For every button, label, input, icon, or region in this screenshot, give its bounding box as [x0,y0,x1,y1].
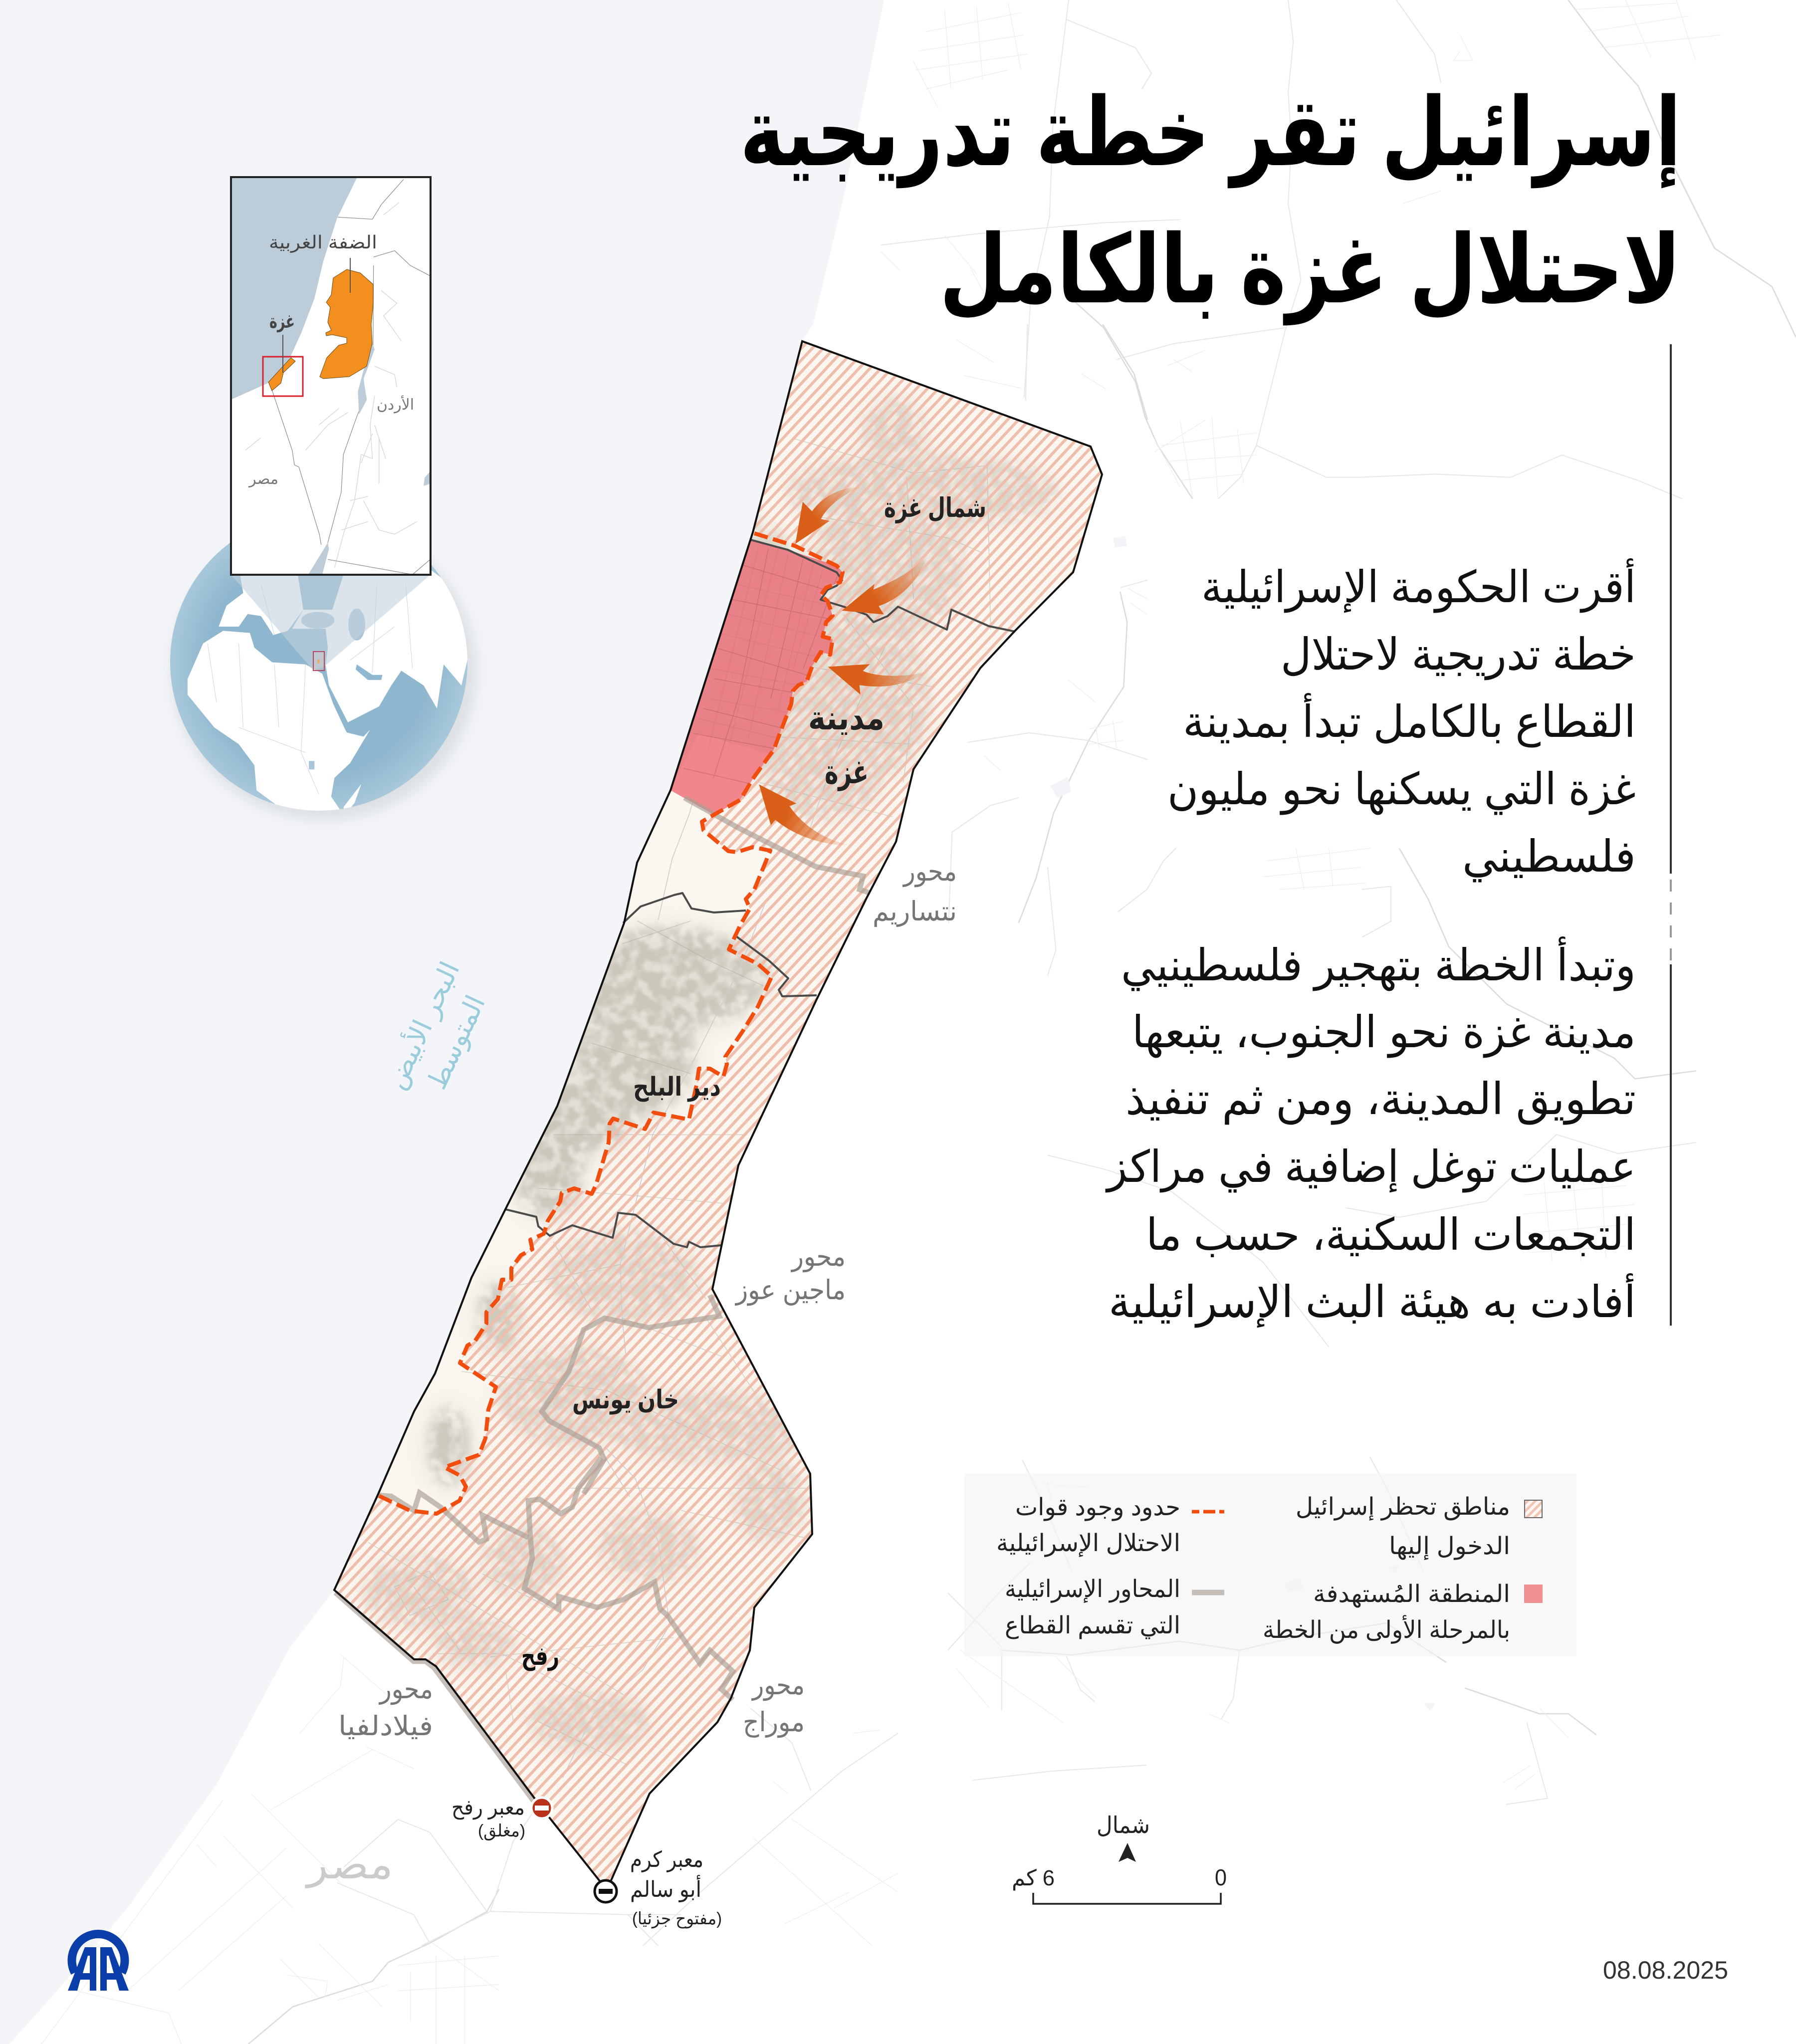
icon: Kerem Shalom crossing partly open [595,1880,617,1902]
label: Rafah crossing: (مغلق) [478,1821,525,1841]
inset Gaza [268,358,295,391]
north arrow [1097,1812,1150,1862]
legend text: axes line [1005,1576,1180,1639]
label: Morag axis: موراج [743,1707,805,1738]
legend swatch: axes line [1192,1590,1224,1595]
text block: first paragraph [1167,558,1636,883]
label: Philadelphi axis: فيلادلفيا [338,1711,433,1741]
title [740,80,1681,326]
internal roads [462,898,782,1497]
inset terrain [245,203,417,568]
label: Philadelphi axis: محور [378,1674,433,1705]
inset label: Jordan: الأردن [377,395,414,413]
occupation forces limit line [378,533,843,1514]
legend text: forbidden zones: مناطق تحظر إسرائيل [1296,1494,1510,1521]
Gaza base fill [334,341,1102,1883]
text block: first paragraph: فلسطيني [1462,832,1636,883]
municipal boundaries [505,540,1015,1247]
scale bar: 0 [1215,1864,1227,1890]
label: Gaza City: مدينة [808,699,885,736]
label: Kerem Shalom crossing: معبر كرم [630,1847,703,1872]
text block: second paragraph: عمليات توغل إضافية في مراكز [1105,1142,1636,1193]
label: Rafah crossing [451,1796,525,1841]
label: Magen Oz axis: ماجين عوز [734,1275,846,1306]
view cone to inset [231,575,431,671]
Gaza outline [334,341,1102,1883]
label: Kerem Shalom crossing [630,1847,722,1929]
legend text: axes line: المحاور الإسرائيلية [1005,1576,1180,1603]
label: Kerem Shalom crossing: (مفتوح جزئيا) [632,1909,722,1929]
scale bar: 6 كم [1012,1866,1055,1891]
legend text: occupation limit line: حدود وجود قوات [1015,1494,1180,1521]
label: Netzarim axis: نتساريم [873,897,957,927]
label: Kerem Shalom crossing: أبو سالم [630,1875,701,1902]
text block: first paragraph: القطاع بالكامل تبدأ بمدينة [1183,693,1636,747]
sea [0,0,884,2044]
vertical rule beside text [1670,344,1672,1326]
arrow: north [795,486,861,544]
text block: second paragraph: أفادت به هيئة البث الإسرائيلية [1109,1273,1636,1328]
inset water bodies [308,343,430,575]
inset locator box [263,357,303,396]
text block: second paragraph: تطويق المدينة، ومن ثم تنفيذ [1125,1074,1636,1125]
text block: second paragraph [1105,936,1636,1328]
legend text: target area [1263,1581,1510,1644]
label: North Gaza: شمال غزة [884,493,986,523]
axis: Morag branch [378,1493,528,1542]
inset sea [231,177,357,400]
legend text: forbidden zones [1296,1494,1510,1560]
text block: first paragraph: خطة تدريجية لاحتلال [1281,630,1636,680]
label: Netzarim axis [873,857,957,927]
label: Gaza City [808,699,885,791]
legend swatch: forbidden zones [1525,1500,1542,1518]
text block: second paragraph: التجمعات السكنية، حسب ما [1146,1210,1636,1259]
label: Khan Younis: خان يونس [572,1385,679,1415]
globe land [188,568,470,814]
label: Morag axis: محور [751,1670,805,1701]
legend text: target area: المنطقة المُستهدفة [1313,1581,1510,1608]
inset West Bank [320,269,373,379]
globe [170,513,476,820]
legend text: target area: بالمرحلة الأولى من الخطة [1263,1614,1510,1644]
panel: Gaza Strip map [305,341,1102,1929]
axis: Philadelphi [335,1592,540,1810]
inset label: West Bank: الضفة الغربية [269,232,377,253]
arrow: south east [759,784,851,846]
location marker on globe [313,652,324,671]
legend text: forbidden zones: الدخول إليها [1389,1533,1510,1560]
label: Magen Oz axis [734,1242,846,1306]
label: Rafah: رفح [521,1642,559,1671]
axis: Netzarim [684,798,870,893]
legend swatch: occupation limit line [1192,1510,1224,1514]
inset leaders [283,258,350,373]
icon: Rafah crossing closed [531,1798,552,1818]
logo: AA [68,1934,129,1991]
legend text: occupation limit line: الاحتلال الإسرائيلية [996,1530,1180,1557]
label: Netzarim axis: محور [902,857,957,887]
urban texture [364,399,1058,1778]
north arrow: شمال [1097,1812,1150,1838]
text block: first paragraph: غزة التي يسكنها نحو مليون [1167,764,1636,815]
text block: first paragraph: أقرت الحكومة الإسرائيلية [1201,558,1636,613]
arrows closing on Gaza City [759,486,929,846]
date: 08.08.2025 [1603,1956,1728,1984]
legend [964,1473,1576,1656]
label: Gaza City: غزة [825,753,869,791]
label: Deir al-Balah: دير البلح [633,1073,721,1102]
legend text: axes line: التي تقسم القطاع [1005,1612,1180,1639]
label: Philadelphi axis [338,1674,433,1741]
axis: Magen Oz [542,1295,719,1494]
label: Mediterranean Sea: البحر الأبيض [379,956,466,1094]
arrow: east [828,664,929,694]
label: Magen Oz axis: محور [790,1242,846,1272]
label: Rafah crossing: معبر رفح [451,1796,525,1820]
inset borders [271,387,321,545]
scale bar [1012,1864,1227,1904]
inset label: Gaza: غزة [269,311,295,332]
inset label: Egypt: مصر [248,471,278,487]
arrow: north east [842,553,927,615]
text block: second paragraph: وتبدأ الخطة بتهجير فلسطينيي [1121,936,1636,991]
label: Morag axis [743,1670,805,1738]
forbidden zone hatching [334,341,1102,1883]
text block: second paragraph: مدينة غزة نحو الجنوب، يتبعها [1132,1007,1636,1058]
legend text: occupation limit line [996,1494,1180,1557]
label: Egypt: مصر [305,1842,393,1888]
legend swatch: target area [1524,1585,1543,1603]
inset map [231,177,431,575]
first phase target zone [671,540,843,815]
axis: Morag [524,1458,733,1700]
road network north east [881,0,1796,499]
label: Mediterranean Sea: المتوسط [422,991,491,1094]
